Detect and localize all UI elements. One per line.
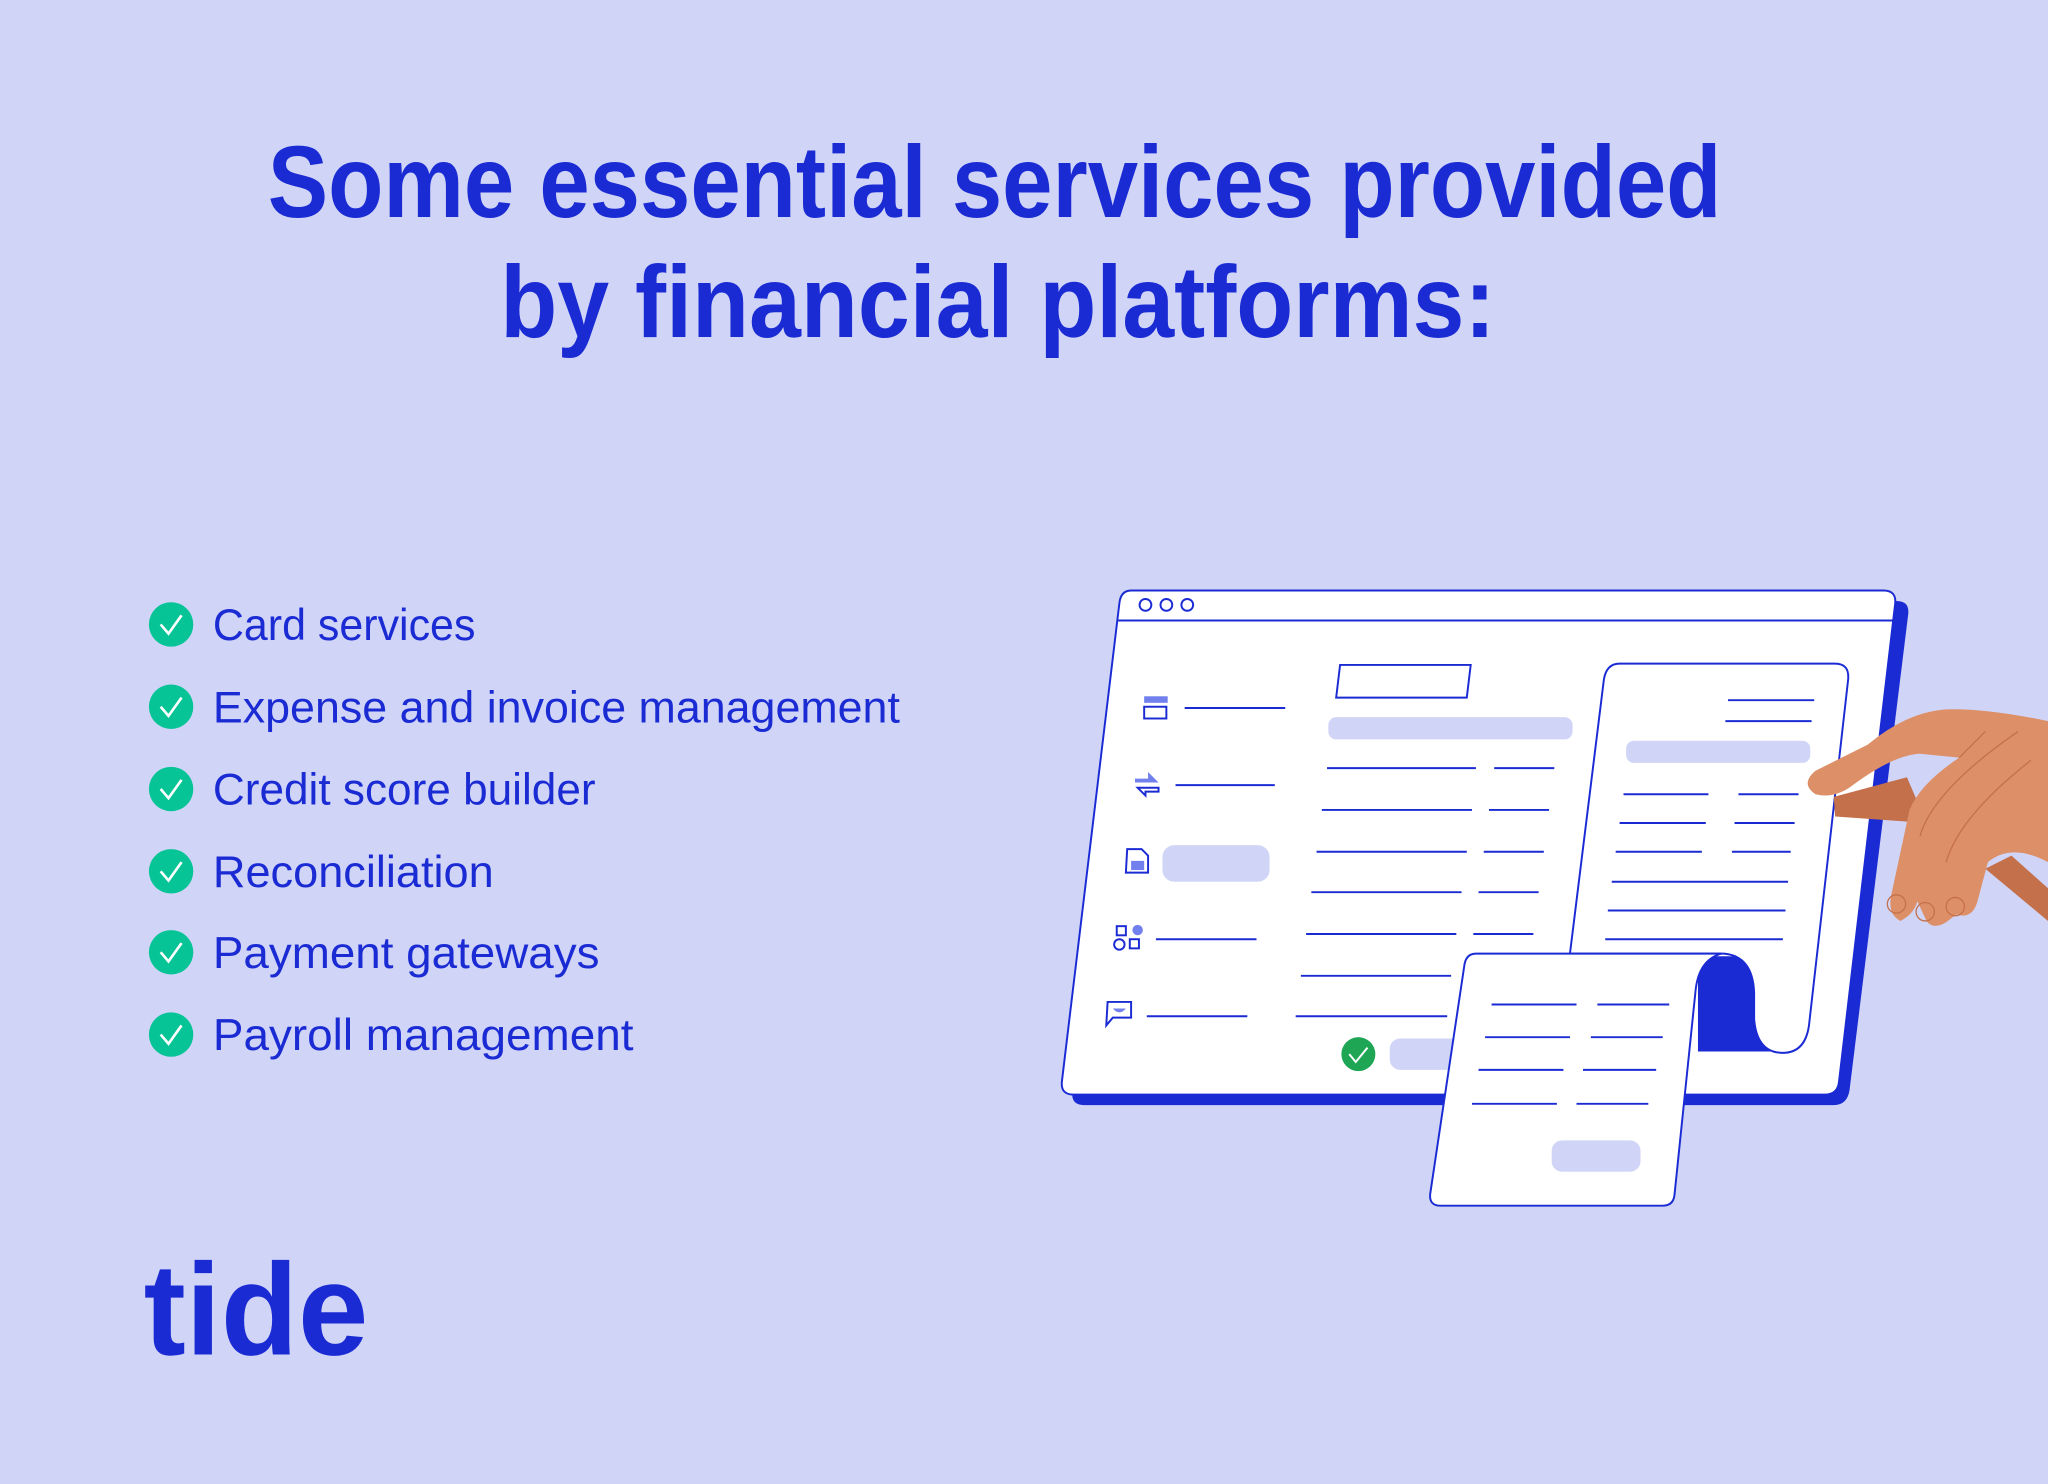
sidebar icons and labels <box>1106 696 1285 1025</box>
browser shadow <box>1072 601 1908 1105</box>
item: Payroll management: Payroll management <box>213 1011 634 1060</box>
browser window <box>1062 590 1895 1095</box>
title <box>268 125 1721 359</box>
item: Card services: Card services <box>213 601 475 650</box>
services list <box>149 601 901 1060</box>
logo: tide: tide <box>144 1237 368 1383</box>
illustration: browser with receipts and hand <box>1062 590 2048 1206</box>
main content lines <box>1296 665 1573 1070</box>
hand <box>1808 709 2048 926</box>
item: Reconciliation: Reconciliation <box>213 848 494 897</box>
title: by financial platforms: <box>500 245 1496 359</box>
title: Some essential services provided <box>268 125 1721 239</box>
icon: green check <box>1341 1037 1375 1071</box>
item: Expense and invoice management: Expense and invoice management <box>213 683 901 732</box>
back receipt <box>1570 664 1848 1053</box>
front receipt <box>1430 954 1721 1206</box>
item: Credit score builder: Credit score builder <box>213 766 596 815</box>
item: Payment gateways: Payment gateways <box>213 929 600 978</box>
